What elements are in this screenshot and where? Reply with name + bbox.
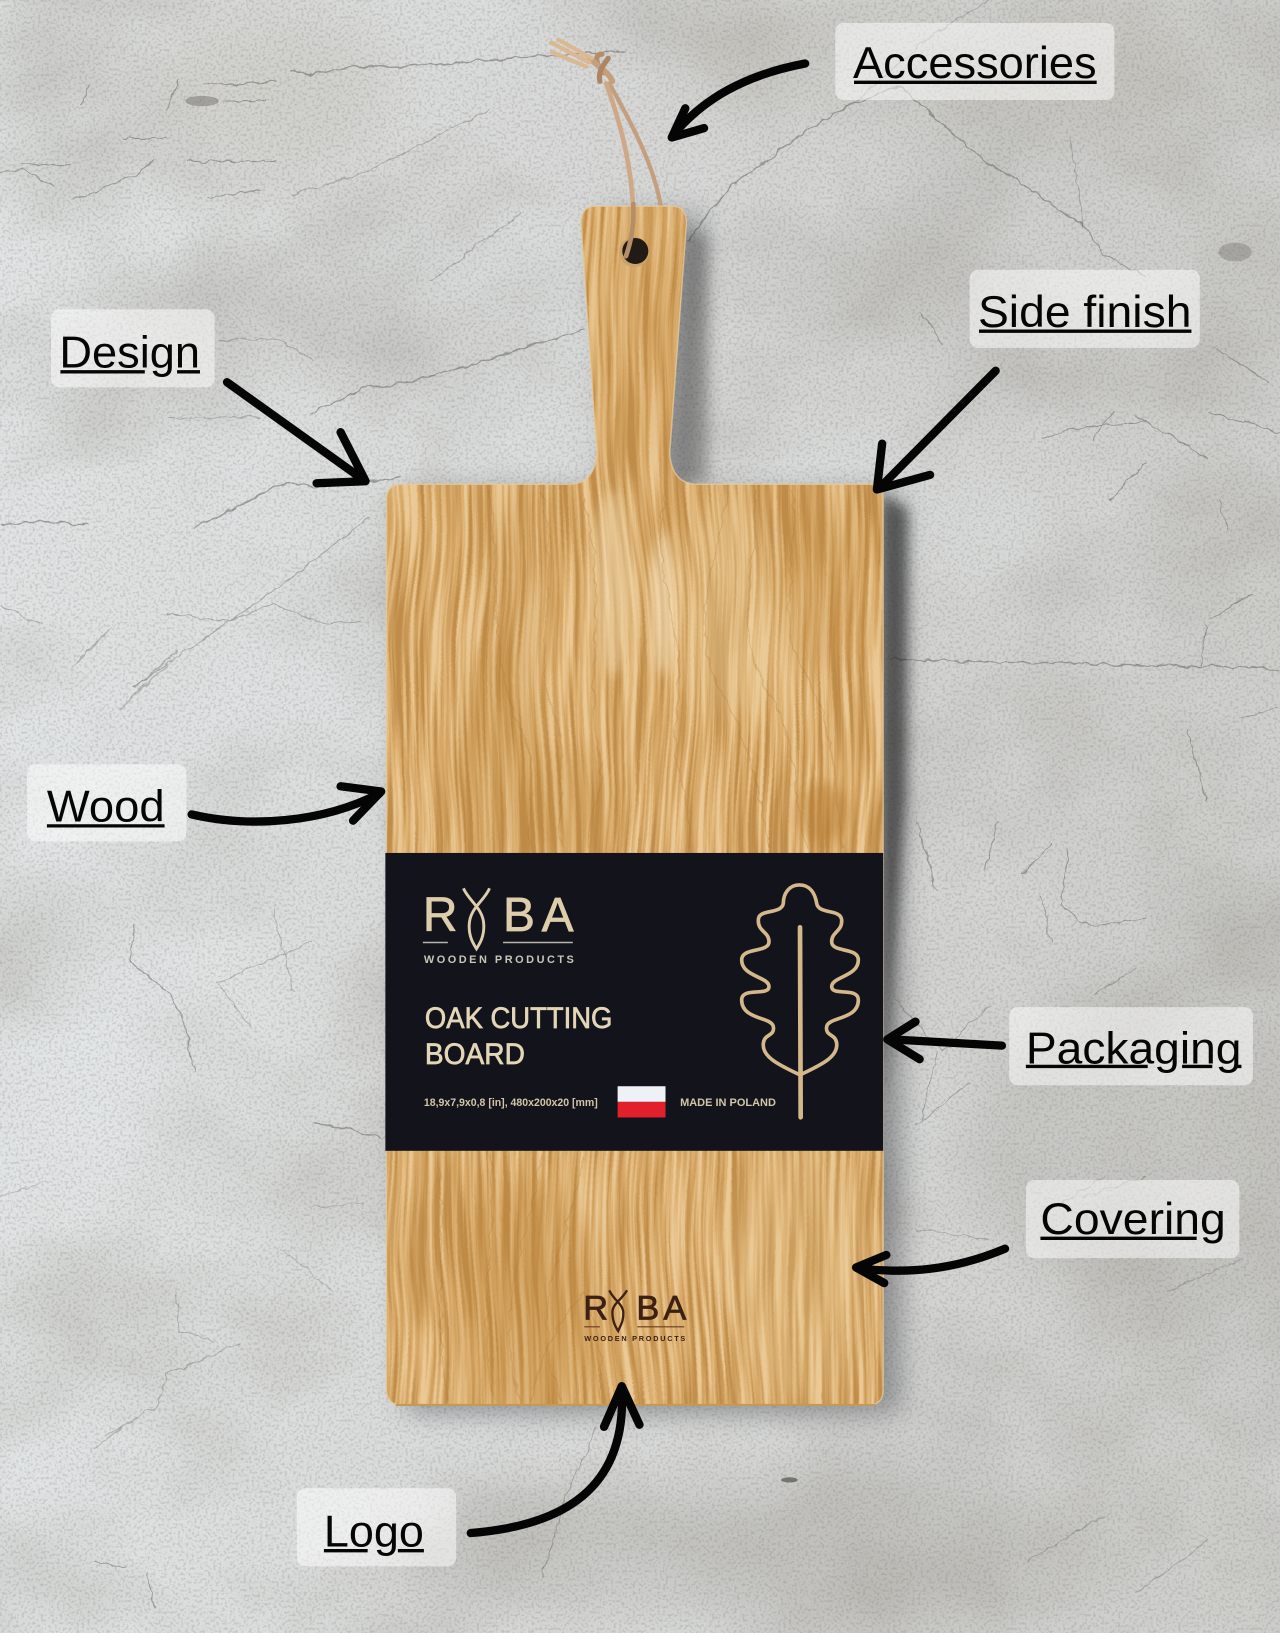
icon: oak leaf bbox=[742, 885, 858, 1117]
callout: Accessories: Accessories bbox=[853, 38, 1097, 88]
arrow: Side finish bbox=[877, 371, 996, 489]
callout: Logo: Logo bbox=[324, 1507, 424, 1557]
callout: Logo bbox=[297, 1488, 456, 1566]
burned logo on board: RYBA bbox=[583, 1290, 686, 1328]
callout: Design bbox=[51, 309, 215, 387]
packaging band bbox=[385, 853, 883, 1151]
brand logo on band: RYBA bbox=[423, 889, 574, 942]
callout: Side finish bbox=[970, 270, 1200, 348]
callout: Packaging: Packaging bbox=[1026, 1023, 1241, 1073]
arrow: Covering bbox=[856, 1249, 1005, 1283]
dimensions: 18,9x7,9x0,8 [in], 480x200x20 [mm] bbox=[424, 1097, 598, 1109]
board shadow bbox=[405, 215, 908, 1413]
callout: Side finish: Side finish bbox=[978, 287, 1191, 337]
callout: Wood: Wood bbox=[47, 782, 165, 832]
product name bbox=[425, 1003, 612, 1071]
wood tone patches bbox=[456, 208, 875, 1427]
product name: OAK CUTTING bbox=[425, 1003, 612, 1035]
leather strap and knot bbox=[551, 40, 633, 256]
product name: BOARD bbox=[425, 1039, 525, 1071]
callout: Covering bbox=[1026, 1180, 1239, 1258]
callout: Covering: Covering bbox=[1040, 1194, 1226, 1244]
brand logo on band bbox=[423, 888, 574, 966]
arrow: Wood bbox=[192, 786, 381, 822]
wood grain lines bbox=[437, 489, 844, 1401]
burned logo on board: WOODEN PRODUCTS bbox=[584, 1334, 685, 1343]
arrow: Packaging bbox=[887, 1022, 1002, 1059]
callout: Wood bbox=[27, 764, 186, 841]
arrow: Accessories bbox=[672, 64, 805, 137]
cutting board bbox=[386, 206, 884, 1406]
arrow: Logo bbox=[471, 1386, 639, 1533]
callout: Design: Design bbox=[59, 328, 200, 378]
polish flag bbox=[618, 1086, 666, 1117]
callout: Accessories bbox=[835, 23, 1114, 100]
brand logo on band: WOODEN PRODUCTS bbox=[424, 954, 574, 966]
leather strap behind board bbox=[606, 83, 661, 208]
made in poland: MADE IN POLAND bbox=[680, 1097, 776, 1109]
callout: Packaging bbox=[1009, 1007, 1253, 1085]
strap hole bbox=[619, 237, 649, 267]
arrow: Design bbox=[227, 382, 366, 483]
